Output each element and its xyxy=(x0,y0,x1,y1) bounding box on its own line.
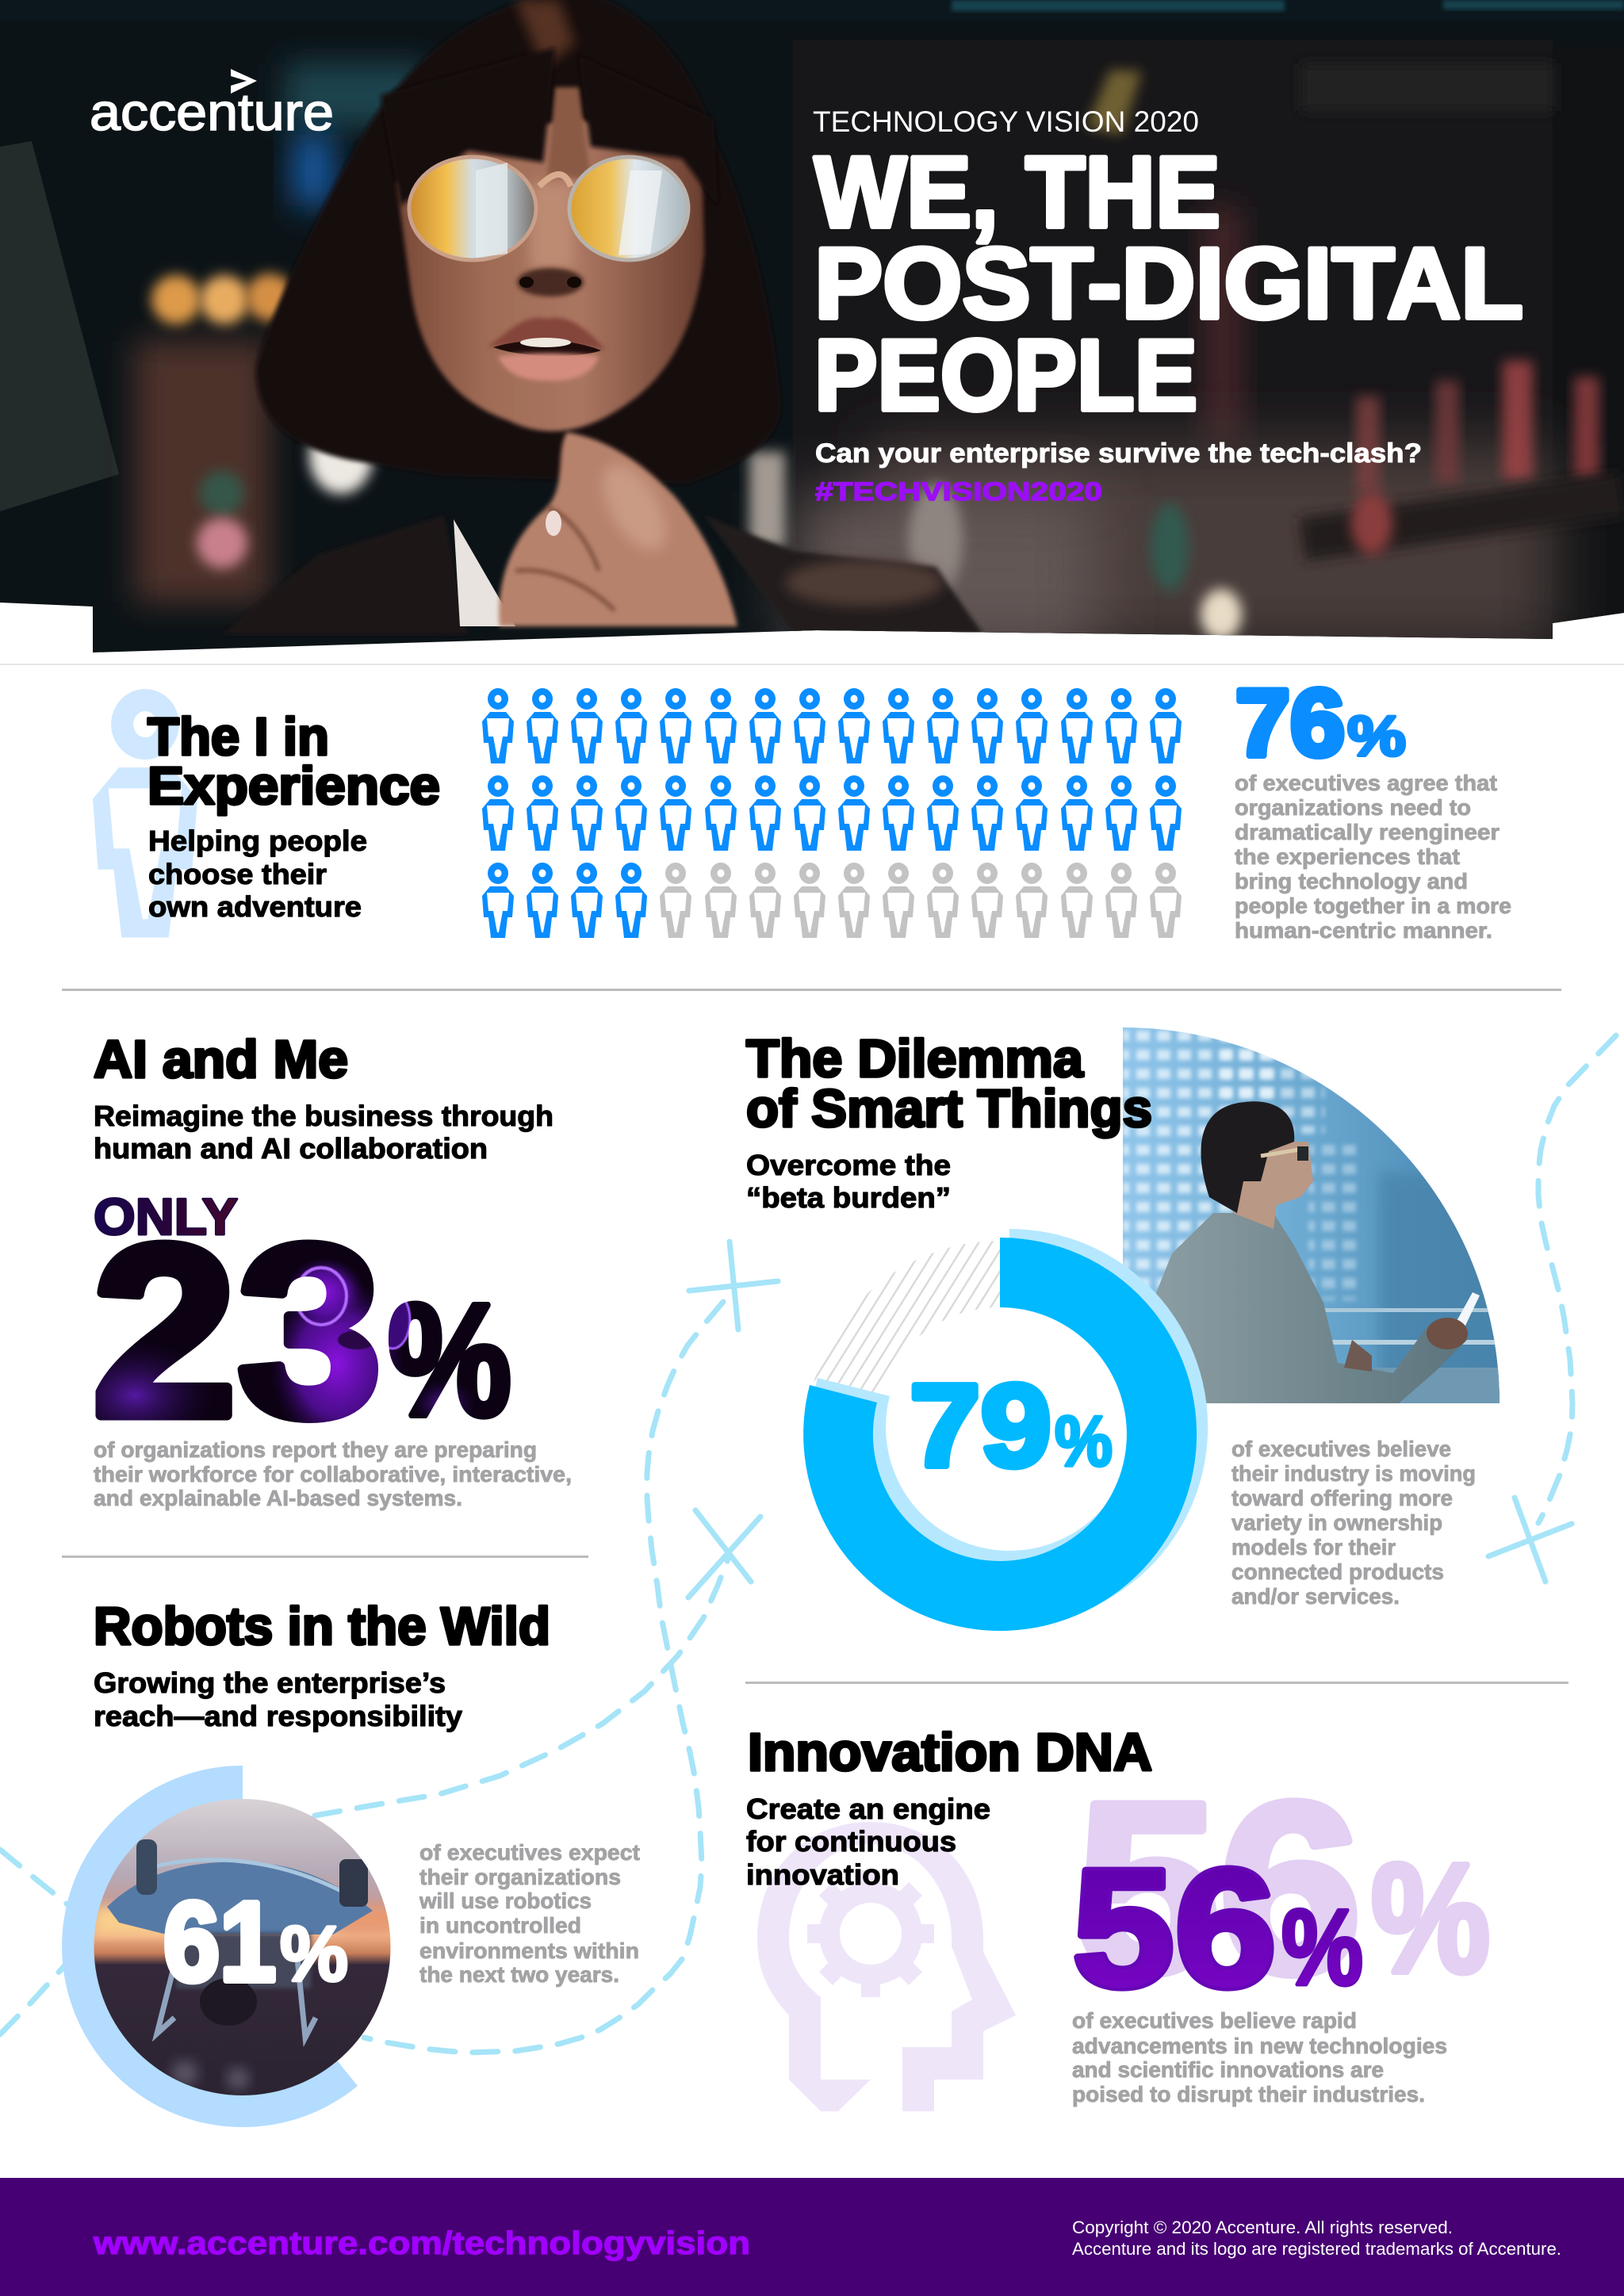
stat: 56 percent xyxy=(1072,1834,1363,2022)
description xyxy=(94,1437,572,1510)
label: only: ONLY xyxy=(94,1188,238,1246)
description xyxy=(419,1840,640,1987)
stat: 61 percent: % xyxy=(280,1910,348,1997)
description: of executives believe xyxy=(1231,1437,1451,1461)
description: people together in a more xyxy=(1235,894,1511,918)
heading: Innovation DNA xyxy=(748,1723,1152,1782)
subheading: “beta burden” xyxy=(746,1181,951,1214)
heading xyxy=(147,707,440,816)
description xyxy=(1231,1437,1476,1609)
hashtag: #TECHVISION2020 xyxy=(815,477,1102,506)
stat: 79 percent: 79 xyxy=(910,1360,1051,1491)
icon: cross right xyxy=(1488,1498,1572,1582)
description: the experiences that xyxy=(1235,844,1460,869)
description: environments within xyxy=(419,1938,639,1963)
panel: Robots in the Wild xyxy=(62,1597,640,2127)
description: of executives believe rapid xyxy=(1072,2008,1357,2033)
stat: 79 percent: % xyxy=(1055,1402,1113,1482)
description: human-centric manner. xyxy=(1235,918,1492,943)
subheading: Reimagine the business through xyxy=(94,1100,553,1132)
description: of executives expect xyxy=(419,1840,640,1865)
photo: man with phone xyxy=(1123,1027,1507,1411)
subheading: human and AI collaboration xyxy=(94,1132,488,1165)
description xyxy=(1072,2008,1447,2107)
copyright: Accenture and its logo are registered trademarks of Accenture. xyxy=(1072,2239,1561,2259)
subheading xyxy=(94,1100,553,1165)
subtitle: Can your enterprise survive the tech-clash? xyxy=(815,438,1422,469)
stat: 56 percent: 56 xyxy=(1072,1834,1277,2022)
panel: The I in Experience xyxy=(93,670,1511,943)
description xyxy=(1235,771,1511,943)
description: their organizations xyxy=(419,1865,621,1889)
glasses xyxy=(409,157,688,260)
description: their industry is moving xyxy=(1231,1461,1476,1486)
subheading: innovation xyxy=(746,1858,899,1891)
stat: 61 percent xyxy=(163,1879,348,2005)
copyright: Copyright © 2020 Accenture. All rights reserved. xyxy=(1072,2218,1453,2237)
main title: WE, THE xyxy=(814,136,1220,248)
stat: 76 percent: 76 xyxy=(1235,670,1345,776)
description: in uncontrolled xyxy=(419,1913,581,1938)
photo: drone xyxy=(94,1798,396,2096)
description: dramatically reengineer xyxy=(1235,820,1500,844)
description: and/or services. xyxy=(1231,1584,1400,1609)
subheading: choose their xyxy=(148,858,327,890)
description: will use robotics xyxy=(419,1888,592,1913)
panel: AI and Me xyxy=(92,1030,572,1510)
stat: 76 percent xyxy=(1235,670,1406,776)
subheading xyxy=(94,1667,462,1732)
woman portrait xyxy=(222,0,983,634)
description: advancements in new technologies xyxy=(1072,2034,1447,2058)
dashed journey lines and crosses xyxy=(0,1035,1616,2053)
stat: 61 percent: 61 xyxy=(163,1879,276,2005)
copyright xyxy=(1072,2218,1561,2259)
main title: PEOPLE xyxy=(814,319,1197,431)
panel: hero photo xyxy=(0,0,1624,658)
heading: Experience xyxy=(147,756,440,816)
stat: pale 56 percent xyxy=(1076,1752,1490,2023)
description: connected products xyxy=(1231,1559,1444,1584)
subheading: for continuous xyxy=(746,1825,956,1858)
stat: 56 percent: % xyxy=(1281,1887,1363,2007)
subheading: reach—and responsibility xyxy=(94,1700,462,1732)
description: and scientific innovations are xyxy=(1072,2057,1384,2082)
heading xyxy=(746,1029,1152,1138)
description: models for their xyxy=(1231,1535,1396,1559)
panel: Innovation DNA xyxy=(746,1723,1490,2111)
subheading xyxy=(746,1793,990,1891)
description: their workforce for collaborative, interactive, xyxy=(94,1462,572,1487)
stat: 23 percent: 23 xyxy=(92,1195,382,1468)
description: bring technology and xyxy=(1235,869,1468,894)
heading: AI and Me xyxy=(94,1030,348,1089)
stat: 23 percent xyxy=(92,1195,511,1468)
pictogram chart: 76 percent of people xyxy=(482,688,1182,938)
stat: 23 percent: % xyxy=(388,1270,511,1449)
stat: 79 percent xyxy=(910,1360,1113,1491)
description: variety in ownership xyxy=(1231,1510,1442,1535)
icon: cross middle xyxy=(688,1510,760,1598)
description: toward offering more xyxy=(1231,1486,1453,1510)
logo: accenture: accenture xyxy=(90,82,334,141)
subheading: Overcome the xyxy=(746,1149,951,1181)
footer xyxy=(0,2178,1624,2296)
stat: pale 56 percent: 56 xyxy=(1076,1752,1362,2023)
hand xyxy=(499,432,737,626)
subheading: Helping people xyxy=(148,825,367,857)
heading: The Dilemma xyxy=(746,1029,1084,1089)
chart: 61 percent ring xyxy=(62,1766,358,2127)
subheading: Create an engine xyxy=(746,1793,990,1825)
man's shirt xyxy=(1150,1213,1467,1403)
stat: pale 56 percent: % xyxy=(1371,1831,1490,2005)
subheading xyxy=(148,825,367,923)
main title xyxy=(814,136,1523,431)
description: organizations need to xyxy=(1235,795,1471,820)
chart: 79 percent donut xyxy=(803,1229,1208,1631)
title block xyxy=(813,105,1523,506)
description: of executives agree that xyxy=(1235,771,1497,795)
subheading xyxy=(746,1149,951,1214)
heading: The I in xyxy=(147,707,329,767)
subheading: Growing the enterprise’s xyxy=(94,1667,446,1699)
shirt and jacket xyxy=(222,515,468,634)
icon: cross top xyxy=(689,1242,778,1330)
panel: The Dilemma of Smart Things xyxy=(746,1027,1507,1631)
icon: large pale person xyxy=(93,689,197,937)
description: the next two years. xyxy=(419,1962,619,1987)
heading: of Smart Things xyxy=(746,1079,1152,1138)
link: www.accenture.com/technologyvision xyxy=(93,2225,750,2261)
main title: POST-DIGITAL xyxy=(814,227,1523,339)
subheading: own adventure xyxy=(148,890,362,923)
heading: Robots in the Wild xyxy=(94,1597,550,1656)
kicker: TECHNOLOGY VISION 2020 xyxy=(813,105,1199,138)
description: poised to disrupt their industries. xyxy=(1072,2082,1425,2107)
stat: 76 percent: % xyxy=(1347,706,1406,768)
icon: head with gear xyxy=(757,1822,1016,2111)
description: and explainable AI-based systems. xyxy=(94,1486,462,1510)
description: of organizations report they are preparing xyxy=(94,1437,537,1462)
